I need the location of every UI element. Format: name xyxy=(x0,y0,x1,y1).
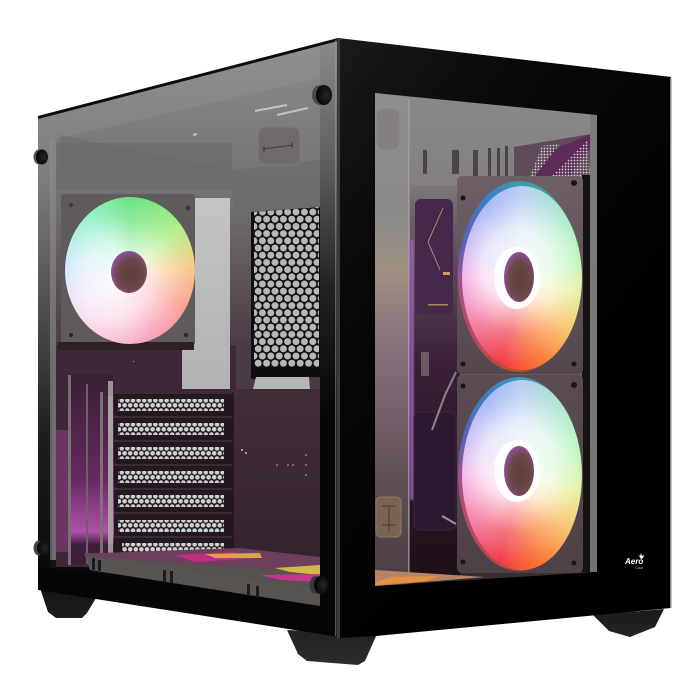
logo: Aerocool: Cool xyxy=(635,565,643,570)
right strip xyxy=(582,175,590,572)
standoff: bottom right xyxy=(310,576,328,594)
left rail xyxy=(50,140,56,568)
hub ring xyxy=(494,440,540,502)
hub xyxy=(111,251,147,293)
fan: upper front xyxy=(457,176,583,374)
panel: front face xyxy=(337,38,672,638)
panel: PCI slot covers xyxy=(108,394,234,560)
hub xyxy=(504,446,534,496)
panel: front window xyxy=(375,93,597,586)
standoff: top right xyxy=(312,85,332,105)
diagonal mesh plate xyxy=(514,134,591,176)
panel: side glass xyxy=(38,38,340,637)
fan: bottom row xyxy=(84,548,320,606)
vent slots xyxy=(423,146,508,176)
cable bay xyxy=(410,185,460,577)
fan: side panel xyxy=(58,194,195,350)
ceiling grommet xyxy=(376,108,400,150)
interior ceiling and back wall xyxy=(52,78,320,560)
logo: Aerocool xyxy=(624,553,644,570)
hub ring xyxy=(494,247,540,309)
ceiling highlights xyxy=(193,105,308,135)
floor reflection xyxy=(375,570,485,586)
hub xyxy=(504,252,534,302)
cable cutout lower xyxy=(414,372,456,530)
foot: right xyxy=(593,609,664,637)
connector and PSU badge xyxy=(421,352,429,376)
panel: plum back wall xyxy=(56,345,320,567)
logo: Aerocool: Aero xyxy=(624,557,643,566)
cable cutout upper xyxy=(415,199,453,315)
left strip xyxy=(375,93,409,586)
foot: left xyxy=(40,588,96,618)
panel: black frame along glass edges xyxy=(38,38,340,637)
standoff: bottom left xyxy=(34,540,49,556)
standoff: top left xyxy=(34,150,48,164)
panel: PSU shroud xyxy=(182,198,230,389)
panel: honeycomb mesh xyxy=(251,207,320,389)
fan: lower front xyxy=(457,375,583,573)
grommet xyxy=(258,127,300,165)
foot: centre xyxy=(287,630,377,665)
expansion bracket with magenta glow xyxy=(68,374,114,564)
